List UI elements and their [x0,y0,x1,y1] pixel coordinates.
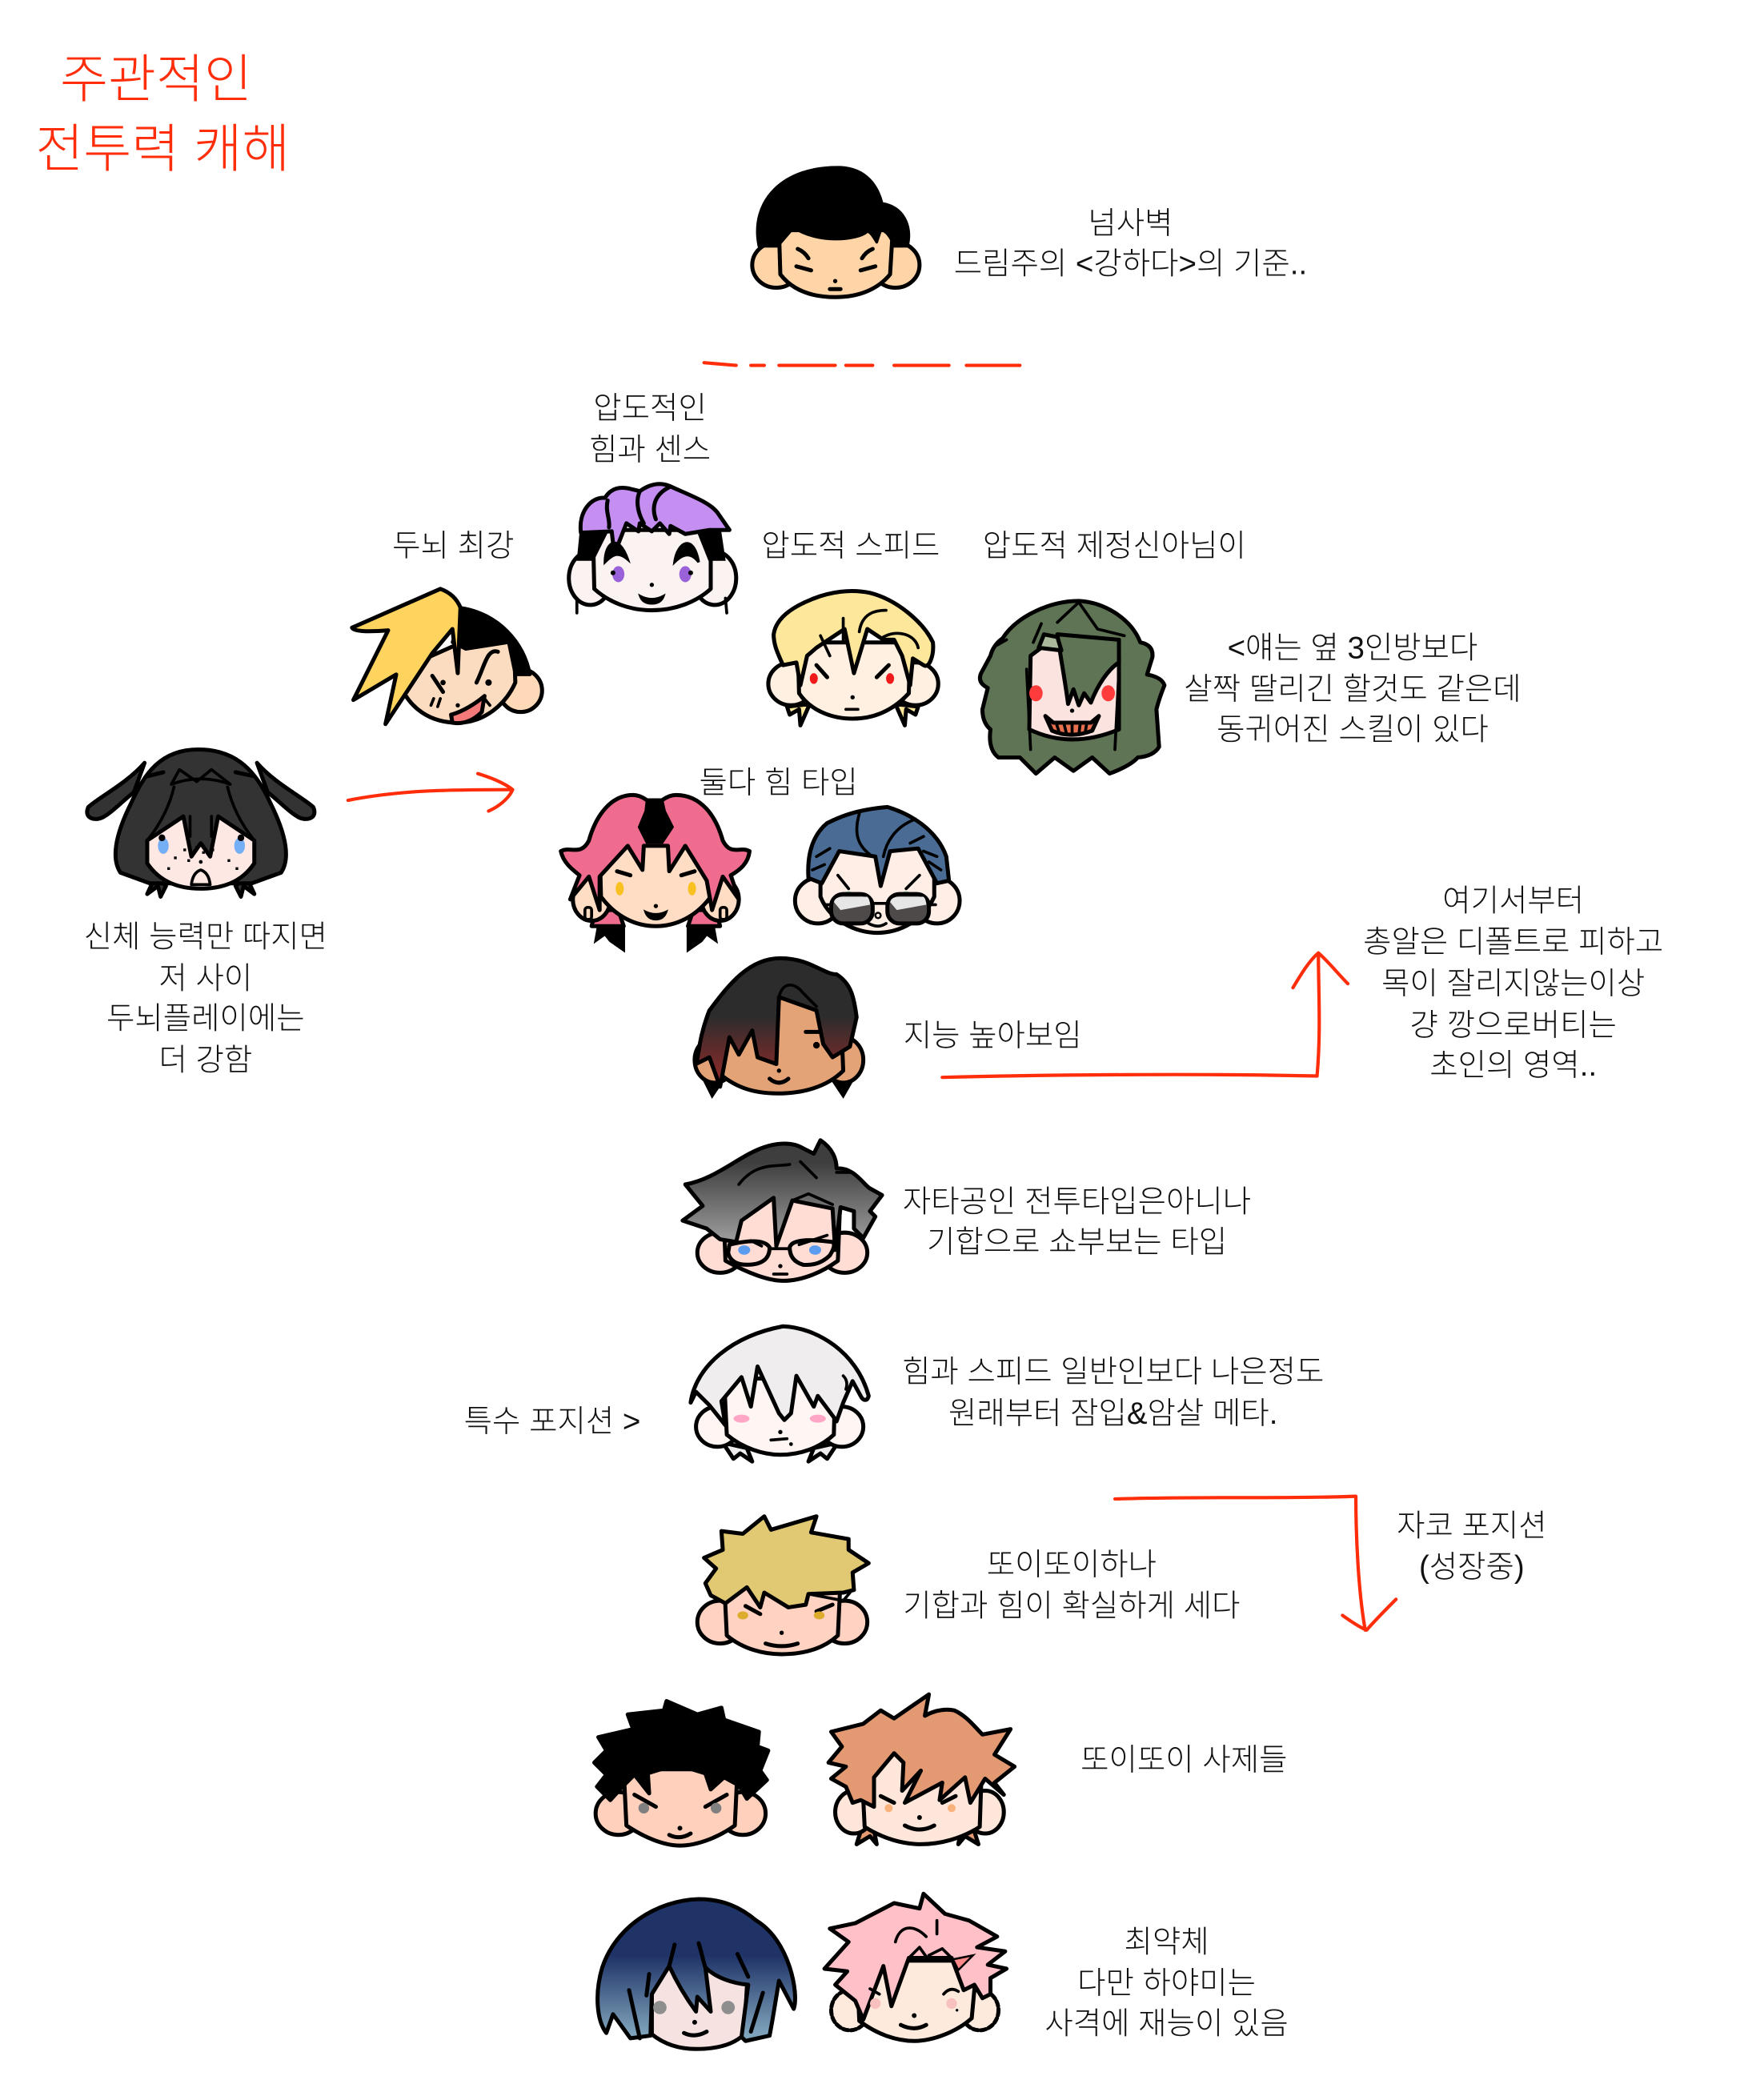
label: weakest: 다만 하야미는 [1077,1966,1256,2001]
icon: black bunny-hair head [87,749,315,896]
icon: orange spiky-haired head [828,1694,1015,1844]
icon: green long-haired head [980,601,1165,774]
label: physical ability note: 더 강함 [158,1043,252,1077]
icon: pink spiky-haired head [824,1894,1007,2041]
label: self-admitted not combat type: 기합으로 쇼부보는 타입 [927,1225,1227,1260]
label: weakest: 사격에 재능이 있음 [1044,2006,1289,2041]
label: overwhelming power: 압도적인 [593,391,707,426]
icon: navy bob-haired head [598,1899,795,2049]
label: both power type: 둘다 힘 타입 [699,766,858,800]
label: even-ish: 기합과 힘이 확실하게 세다 [903,1589,1240,1624]
title: 주관적인 [60,50,252,109]
icon: white-haired head [691,1326,868,1461]
icon: blond head [768,591,938,725]
label: superhuman note: 초인의 영역.. [1429,1048,1597,1083]
label: low-level position: (성장중) [1419,1550,1525,1585]
icon: black spiky-haired head [595,1701,768,1846]
icon: black-haired man head [752,167,920,297]
icon: yellow spiky-haired head [697,1517,868,1654]
red arrow: toward power group [348,774,512,811]
label: physical ability note: 신체 능력만 따지면 [84,920,327,954]
icon: blue-haired sunglasses head [795,807,960,933]
label: low-level position: 자코 포지션 [1397,1509,1547,1543]
label: slightly better than average: 힘과 스피드 일반인보다 나은정도 [902,1355,1324,1389]
label: brain strongest: 두뇌 최강 [392,529,514,563]
label: backward note on 3: 살짝 딸리긴 할것도 같은데 [1184,672,1521,707]
label: physical ability note: 두뇌플레이에는 [106,1001,305,1036]
label: superhuman note: 목이 잘리지않는이상 [1381,967,1645,1001]
icon: grey spiky-haired glasses head [683,1140,882,1280]
red dashed divider [704,363,1020,366]
label: backward note on 3: 동귀어진 스킬이 있다 [1217,712,1489,747]
label: weakest: 최약체 [1125,1925,1209,1959]
icon: yellow and black hair head [352,589,542,724]
label: physical ability note: 저 사이 [158,961,252,996]
label: top standard: 넘사벽 [1088,206,1173,241]
label: the disciples: 또이또이 사제들 [1080,1743,1287,1777]
label: backward note on 3: <얘는 옆 3인방보다 [1228,631,1477,665]
icon: dark and red haired head [695,958,864,1097]
label: superhuman note: 여기서부터 [1442,884,1584,918]
title: 전투력 캐해 [35,120,290,178]
label: overwhelmingly insane: 압도적 제정신아님이 [983,529,1246,563]
red arrow: down to low-level position [1115,1497,1396,1630]
label: slightly better than average: 원래부터 잠입&암살 메타. [948,1397,1277,1431]
label: top standard: 드림주의 <강하다>의 기준.. [954,246,1307,281]
icon: purple-haired head [569,484,736,613]
red arrow: up to superhuman note [942,953,1348,1077]
label: overwhelming speed: 압도적 스피드 [761,529,940,563]
label: superhuman note: 걍 깡으로버티는 [1410,1008,1617,1043]
label: overwhelming power: 힘과 센스 [589,433,711,467]
label: self-admitted not combat type: 자타공인 전투타입은아니나 [903,1185,1251,1220]
icon: pink-haired head [561,795,749,950]
label: looks smart: 지능 높아보임 [904,1019,1082,1053]
label: even-ish: 또이또이하나 [987,1548,1157,1582]
label: superhuman note: 총알은 디폴트로 피하고 [1363,925,1663,960]
label: special position: 특수 포지션 > [464,1405,640,1439]
